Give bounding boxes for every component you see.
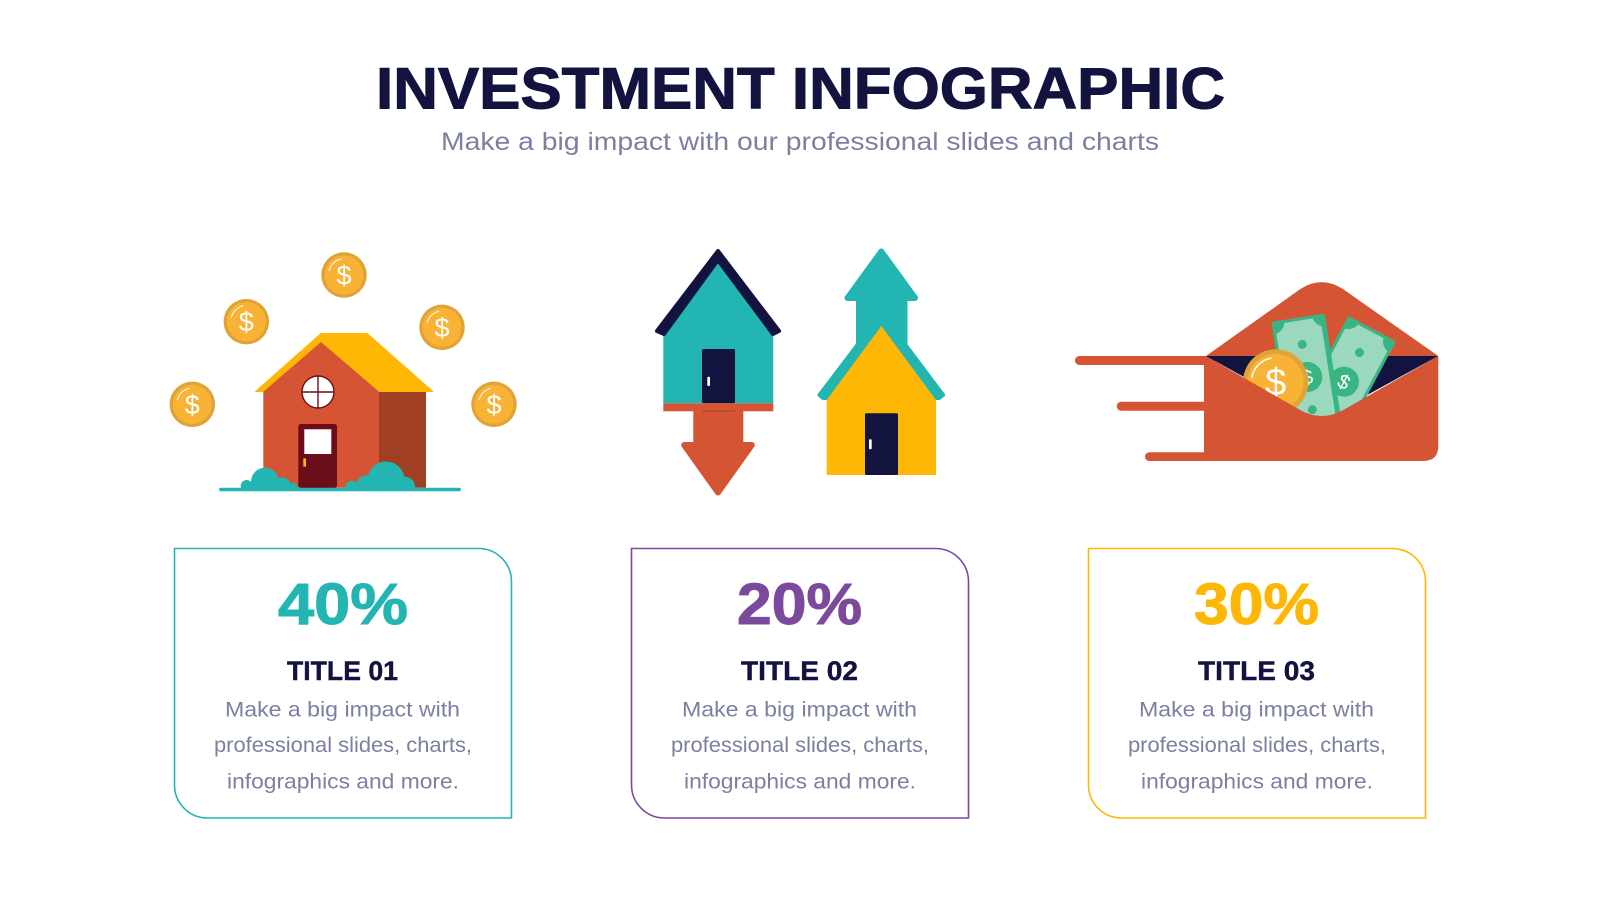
banknote right: [1330, 316, 1396, 412]
card body text: infographics and more.: [1141, 770, 1373, 794]
teal house: [657, 251, 779, 411]
icon: coin top: [321, 252, 367, 298]
card body text: Make a big impact with: [225, 698, 460, 722]
icon: coin top: $: [336, 260, 352, 290]
card body text: Make a big impact with: [682, 698, 917, 722]
envelope flap: [1206, 282, 1438, 356]
envelope front: [1204, 356, 1438, 461]
card title: TITLE 01: [287, 656, 398, 686]
up arrow behind yellow house: [820, 252, 943, 398]
title: INVESTMENT INFOGRAPHIC: [376, 56, 1225, 122]
card body text: [214, 698, 472, 794]
card title: TITLE 03: [1198, 656, 1315, 686]
house: [256, 334, 433, 488]
card body text: professional slides, charts,: [671, 734, 929, 757]
icon: coin upper left: [224, 299, 269, 344]
icon: coin lower left: [170, 382, 215, 427]
panel: card 3: [1088, 548, 1426, 818]
card body text: infographics and more.: [684, 770, 916, 794]
envelope inside: [1206, 356, 1438, 420]
icon: coin lower right: $: [486, 390, 502, 420]
coin: $: [1265, 362, 1286, 404]
coin: [1243, 349, 1308, 415]
icon: coin lower right: [471, 382, 517, 427]
banknote left: $: [1300, 366, 1315, 390]
icon: envelope with money: [1075, 282, 1438, 461]
icon: house with coins: [170, 252, 517, 498]
panel: card 2: [632, 548, 968, 818]
card body text: [671, 698, 929, 794]
banknote right: $: [1333, 370, 1354, 395]
card title: TITLE 02: [741, 656, 858, 686]
card body text: professional slides, charts,: [214, 734, 472, 757]
icon: coin lower left: $: [185, 390, 200, 420]
yellow house: [827, 326, 936, 475]
panel: card 1: [174, 548, 512, 818]
percentage 20%: 20%: [737, 572, 862, 637]
card body text: Make a big impact with: [1139, 698, 1374, 722]
banknote left: [1272, 314, 1340, 414]
icon: coin upper left: $: [239, 307, 254, 337]
card body text: professional slides, charts,: [1128, 734, 1386, 757]
icon: coin upper right: [419, 305, 465, 350]
card body text: [1128, 698, 1386, 794]
percentage 30%: 30%: [1194, 572, 1319, 637]
bushes and ground: [219, 462, 461, 492]
speed lines: [1075, 356, 1217, 461]
icon: house value down and up arrows: [657, 251, 943, 492]
subtitle: Make a big impact with our professional slides and charts: [441, 128, 1159, 156]
icon: coin upper right: $: [434, 313, 450, 343]
percentage 40%: 40%: [278, 572, 408, 637]
down arrow: [684, 411, 752, 492]
card body text: infographics and more.: [227, 770, 459, 794]
